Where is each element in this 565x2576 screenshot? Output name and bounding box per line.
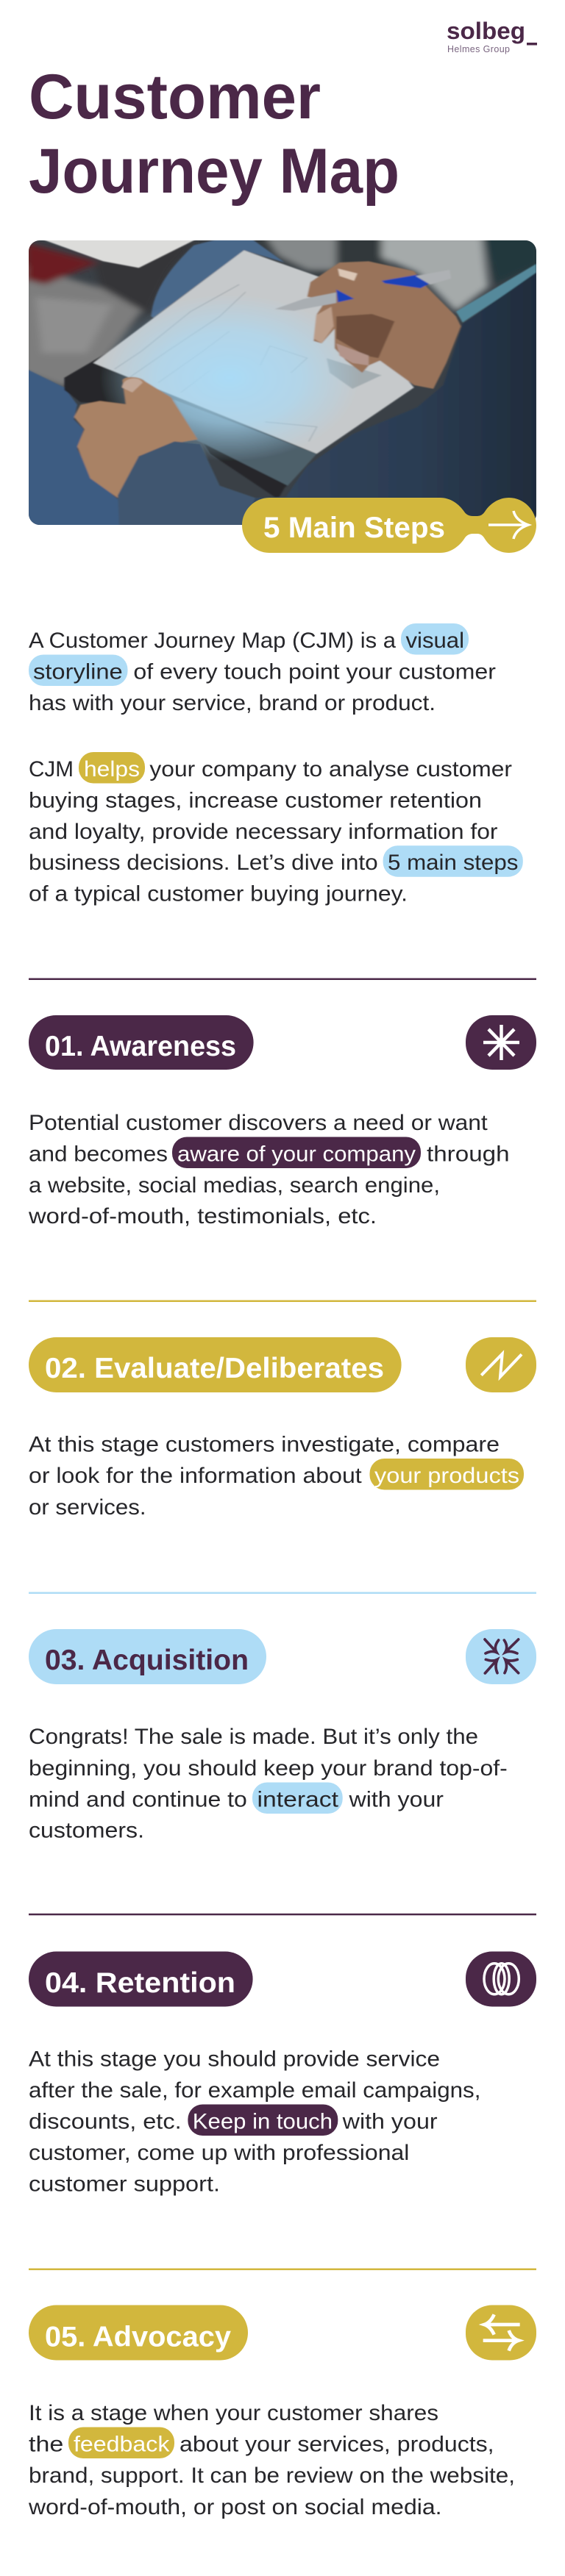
text: At this stage you should provide service <box>29 2047 440 2072</box>
heading pill <box>29 1337 402 1392</box>
text: brand, support. It can be review on the website, <box>29 2464 515 2488</box>
icon: overlapping rings <box>466 1951 536 2007</box>
text: word-of-mouth, or post on social media. <box>28 2495 442 2519</box>
heading pill <box>29 1015 254 1070</box>
text: It is a stage when your customer shares <box>29 2401 438 2425</box>
text: Congrats! The sale is made. But it’s only the <box>29 1725 478 1749</box>
heading pill <box>29 2305 248 2360</box>
step 4: Retention <box>29 1951 536 2197</box>
intro paragraph 2: helps <box>84 757 140 781</box>
text: Potential customer discovers a need or want <box>29 1111 488 1135</box>
intro paragraph 2: CJM <box>29 757 74 781</box>
text: At this stage customers investigate, compare <box>29 1433 500 1457</box>
text <box>29 1725 508 1842</box>
step 3: Acquisition <box>29 1629 536 1842</box>
text: and becomes <box>29 1142 168 1166</box>
text: through <box>427 1142 510 1166</box>
icon: two opposite arrows <box>466 2305 536 2360</box>
text: feedback <box>74 2432 170 2456</box>
heading pill: 01. Awareness <box>45 1031 236 1062</box>
title: Customer <box>29 62 321 132</box>
left sleeve <box>118 442 255 527</box>
heading pill: 04. Retention <box>45 1967 235 1999</box>
text: word-of-mouth, testimonials, etc. <box>28 1204 377 1228</box>
right arm and shoulder <box>242 272 536 527</box>
heading pill: 02. Evaluate/Deliberates <box>45 1353 384 1384</box>
intro paragraph 2: buying stages, increase customer retention <box>29 788 482 812</box>
text <box>29 1433 524 1520</box>
text: beginning, you should keep your brand top-of- <box>29 1756 508 1781</box>
intro paragraph 1 <box>29 623 496 715</box>
text <box>29 2047 480 2197</box>
text: with your <box>348 1788 444 1811</box>
intro paragraph 1: A Customer Journey Map (CJM) is a <box>29 629 396 653</box>
text: aware of your company <box>177 1142 416 1166</box>
intro paragraph 1: has with your service, brand or product. <box>29 691 436 715</box>
handwritten notes on the paper <box>115 285 317 442</box>
intro paragraph 2: 5 main steps <box>388 851 518 875</box>
text <box>28 2401 515 2519</box>
text: about your services, products, <box>180 2432 494 2456</box>
text: Keep in touch <box>193 2110 333 2134</box>
intro paragraph 1: of every touch point your customer <box>133 659 496 684</box>
heading pill: 03. Acquisition <box>45 1645 249 1676</box>
intro paragraph 2: business decisions. Let’s dive into <box>29 851 378 875</box>
text: the <box>29 2432 63 2456</box>
heading pill <box>29 1629 266 1684</box>
text: your products <box>374 1464 519 1488</box>
step 2: Evaluate/Deliberates <box>29 1337 536 1520</box>
icon: arrow right <box>488 511 528 539</box>
text <box>28 1111 510 1228</box>
left hand <box>74 377 198 499</box>
heading pill <box>29 1951 253 2007</box>
intro paragraph 2: of a typical customer buying journey. <box>29 882 408 906</box>
logo: solbeg Helmes Group: solbeg <box>447 18 525 44</box>
badge: 5 Main Steps <box>242 498 536 553</box>
blue light on the paper <box>103 303 349 460</box>
badge: 5 Main Steps: 5 Main Steps <box>263 512 445 544</box>
logo: solbeg Helmes Group: Helmes Group <box>447 44 510 54</box>
title: Journey Map <box>29 136 399 207</box>
text: discounts, etc. <box>29 2110 182 2134</box>
text: after the sale, for example email campaigns, <box>29 2078 480 2103</box>
text: or look for the information about <box>29 1464 362 1488</box>
step 1: Awareness <box>28 1015 536 1228</box>
text: customers. <box>29 1819 144 1842</box>
intro paragraph 2 <box>29 752 523 906</box>
text: a website, social medias, search engine, <box>29 1173 440 1198</box>
text: interact <box>257 1788 339 1811</box>
logo: solbeg Helmes Group <box>447 18 537 54</box>
text: mind and continue to <box>29 1788 247 1811</box>
intro paragraph 1: storyline <box>33 659 123 684</box>
intro paragraph 2: your company to analyse customer <box>149 757 512 781</box>
intro paragraph 1: visual <box>406 629 464 653</box>
heading pill: 05. Advocacy <box>45 2322 231 2353</box>
title <box>29 62 399 207</box>
right hand <box>307 261 461 389</box>
photo: hands writing on a paper notepad <box>22 235 540 530</box>
icon: four arrows pointing inward <box>466 1629 536 1684</box>
pen <box>274 270 451 311</box>
icon: zigzag <box>466 1337 536 1392</box>
text: customer support. <box>29 2172 220 2197</box>
text: customer, come up with professional <box>29 2141 409 2165</box>
intro paragraph 2: and loyalty, provide necessary information for <box>29 820 498 844</box>
icon: asterisk <box>466 1015 536 1070</box>
text: with your <box>342 2110 438 2134</box>
text: or services. <box>29 1495 146 1520</box>
step 5: Advocacy <box>28 2305 536 2519</box>
